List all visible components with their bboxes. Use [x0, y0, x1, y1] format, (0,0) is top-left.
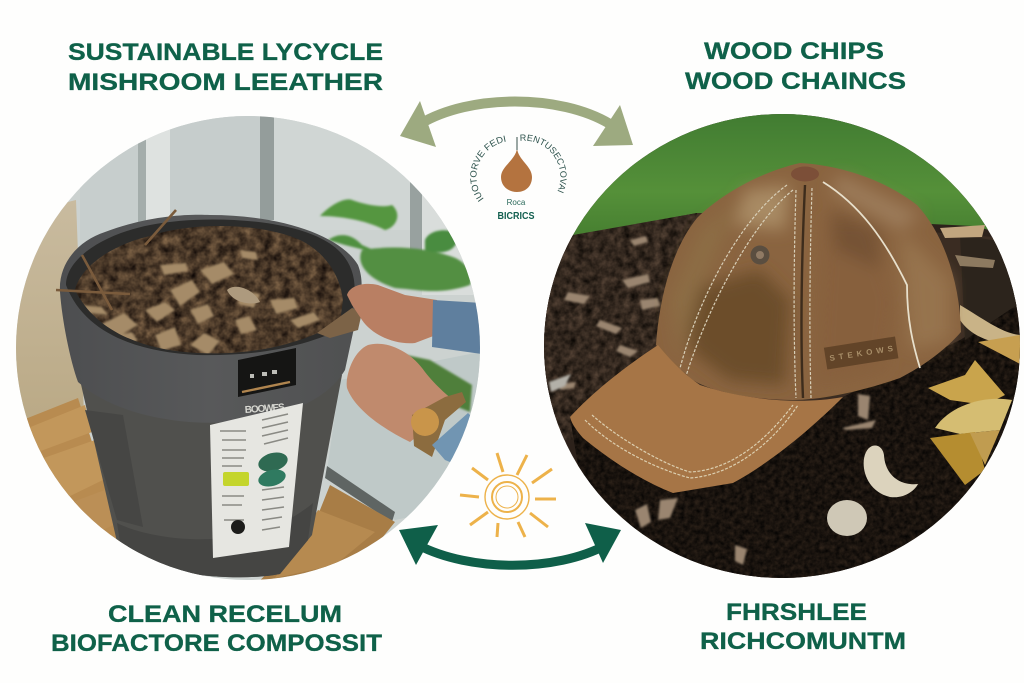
leaves	[320, 199, 472, 412]
drop caption: Roca	[507, 198, 526, 207]
title: bottom right heading	[700, 599, 906, 655]
title: bottom left heading	[51, 601, 382, 657]
cap shading	[670, 175, 950, 385]
title: top right heading: WOOD CHIPS	[704, 38, 884, 65]
title: bottom right heading: RICHCOMUNTM	[700, 628, 906, 655]
bin body	[80, 375, 342, 577]
panel: right photo circle, leather cap on soil	[540, 105, 1024, 595]
soil	[540, 210, 1024, 590]
greenhouse background	[15, 110, 490, 522]
cap brim	[570, 345, 843, 493]
pebble	[827, 500, 867, 536]
title: top left heading: SUSTAINABLE LYCYCLE	[68, 39, 383, 66]
arrow: olive top double arrow	[400, 101, 633, 147]
cap button	[791, 166, 819, 182]
hands	[347, 284, 482, 470]
icon: brown drop with circular text: IUOTORVE FEDI	[470, 136, 506, 202]
arrow: dark green bottom double arrow	[399, 523, 621, 565]
title: bottom left heading: BIOFACTORE COMPOSSIT	[51, 630, 382, 657]
title: bottom right heading: FHRSHLEE	[726, 599, 867, 626]
icon: brown drop with circular text	[470, 134, 567, 222]
grub	[864, 445, 918, 497]
leather cap	[570, 163, 961, 493]
cap eyelet	[750, 246, 770, 264]
title: bottom left heading: CLEAN RECELUM	[108, 601, 342, 628]
panel: left photo circle, compost bin	[10, 110, 490, 600]
mulch pile	[56, 210, 362, 365]
bin label	[210, 403, 303, 558]
cap crown	[656, 163, 961, 400]
icon: brown drop with circular text: RENTUSECTOVAI	[520, 134, 567, 194]
bin display	[238, 348, 296, 397]
cap patch: STEKOWS	[829, 344, 894, 363]
title: top left heading	[68, 39, 383, 96]
title: top left heading: MISHROOM LEEATHER	[68, 69, 383, 96]
bin interior	[66, 219, 355, 355]
bin brand text: BOOWES	[244, 402, 285, 416]
dry leaves and wood	[928, 225, 1022, 485]
icon: orange sun	[460, 453, 556, 537]
cap patch	[824, 336, 898, 369]
icon: brown drop with circular text: BICRICS	[498, 211, 535, 222]
cap seams	[802, 185, 805, 398]
compost bin	[60, 215, 362, 577]
wooden deck	[27, 398, 395, 580]
bin rim	[60, 215, 362, 423]
title: top right heading: WOOD CHAINCS	[685, 68, 906, 95]
grass	[572, 114, 988, 236]
title: top right heading	[685, 38, 906, 95]
